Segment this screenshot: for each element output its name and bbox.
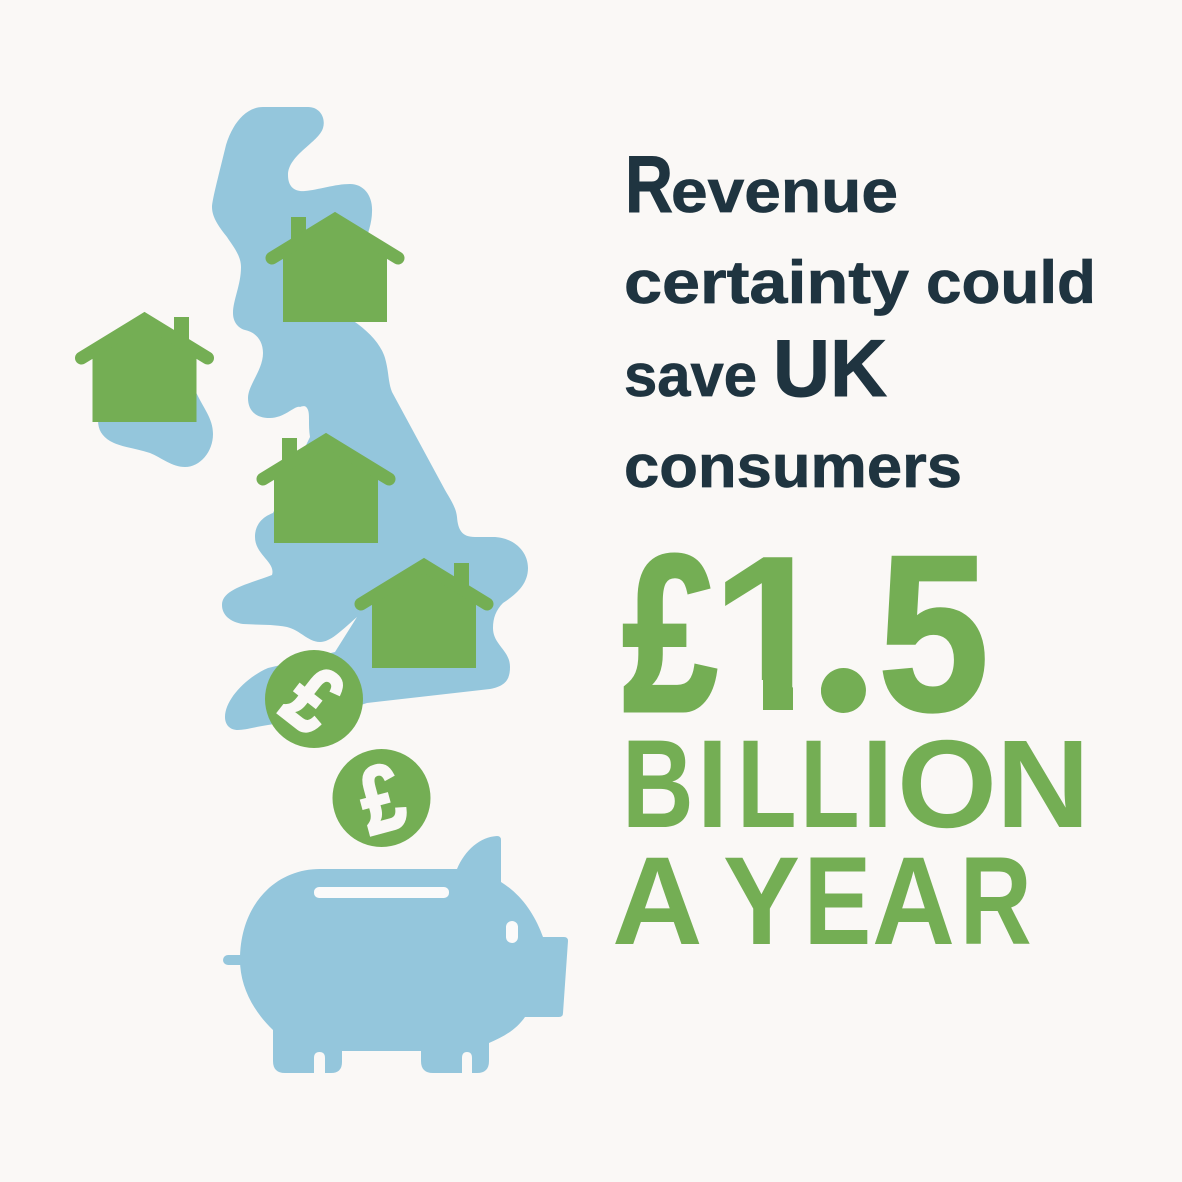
map of the UK and Ireland <box>98 107 528 730</box>
icon: tilted pound coin: £ <box>265 645 363 754</box>
infographic canvas <box>75 107 1092 1073</box>
heading: BILLION: O <box>897 715 997 854</box>
heading: BILLION: N <box>996 715 1090 854</box>
heading: BILLION: I <box>697 715 728 854</box>
text line: certainty could: certainty <box>624 249 910 316</box>
icon: house over southern England <box>361 562 487 668</box>
heading: BILLION: I <box>862 715 893 854</box>
icon: piggy bank <box>228 836 568 1073</box>
text line: Revenue: evenue <box>671 158 898 225</box>
big figure: £1.5: 1 <box>710 510 833 758</box>
big figure: £1.5: £ <box>623 510 717 758</box>
heading: A YEAR: R <box>960 832 1032 971</box>
icon: falling pound coin: £ <box>348 742 416 855</box>
icon: house over Ireland <box>82 316 208 422</box>
text line: Revenue: R <box>625 140 673 230</box>
heading: A YEAR: A <box>872 832 955 971</box>
text block: revenue statement <box>624 140 1096 500</box>
heading: BILLION: L <box>737 715 797 854</box>
text line: consumers: consumers <box>624 433 962 500</box>
heading: BILLION: B <box>622 715 694 854</box>
big figure: £1.5: . <box>797 415 889 784</box>
icon: house over northern England <box>263 437 389 543</box>
text line: save UK: save <box>624 342 757 409</box>
map: Ireland <box>98 390 213 467</box>
text line: certainty could: could <box>926 249 1096 316</box>
heading: A YEAR: E <box>804 832 871 971</box>
text line: save UK: UK <box>773 324 887 414</box>
map: Great Britain <box>212 107 528 730</box>
icon: house over Scotland <box>272 216 398 322</box>
heading: BILLION: L <box>800 715 860 854</box>
big figure: £1.5: 5 <box>878 510 989 758</box>
heading: A YEAR: Y <box>723 832 800 971</box>
heading: A YEAR: A <box>612 832 699 971</box>
